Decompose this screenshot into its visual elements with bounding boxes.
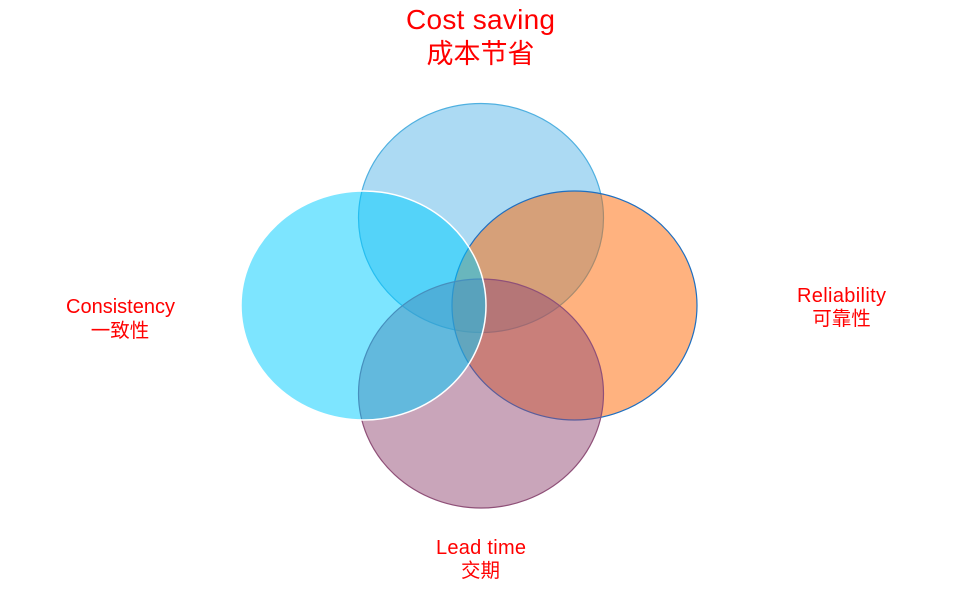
title: cost saving: 成本节省 — [426, 39, 534, 69]
label: consistency: 一致性 — [91, 320, 149, 342]
label: reliability — [797, 285, 886, 330]
label: lead time: Lead time — [436, 537, 526, 559]
label: lead time: 交期 — [461, 560, 500, 582]
label: consistency — [66, 296, 175, 342]
circle: lead time — [358, 279, 604, 508]
circle: cost saving — [358, 104, 604, 332]
label: reliability: Reliability — [797, 285, 886, 307]
title: cost saving: Cost saving — [406, 4, 555, 35]
label: reliability: 可靠性 — [812, 308, 871, 330]
label: consistency: Consistency — [66, 296, 175, 318]
label: lead time — [436, 537, 526, 582]
circle: reliability — [452, 191, 697, 420]
circle: consistency — [241, 191, 486, 420]
title: cost saving — [406, 4, 555, 69]
